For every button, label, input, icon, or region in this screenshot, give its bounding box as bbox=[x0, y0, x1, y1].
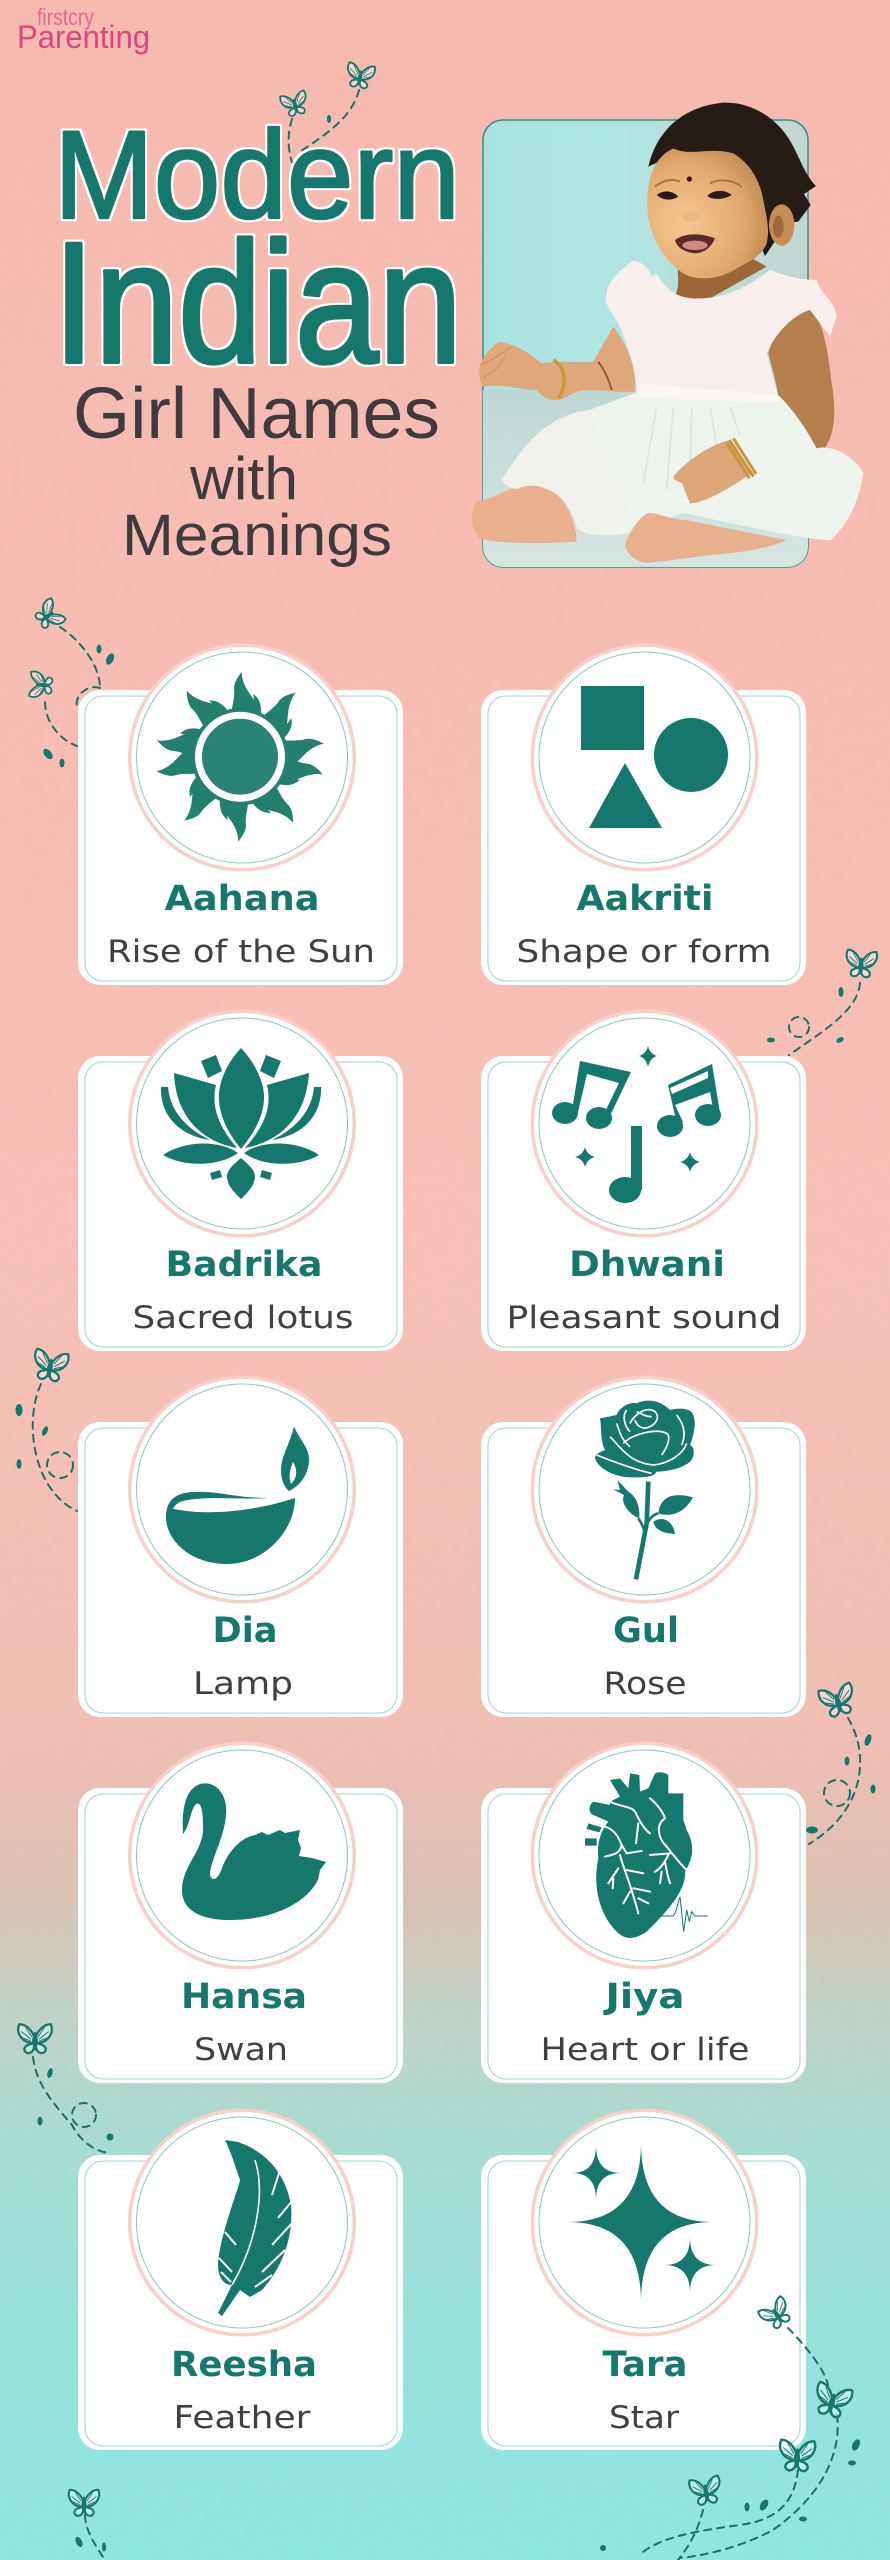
decoration: butterfly bottom left bbox=[69, 2490, 106, 2560]
icon: sun bbox=[153, 672, 327, 842]
card: Dhwani bbox=[481, 1010, 806, 1351]
meaning: Rise of the Sun: Rise of the Sun bbox=[107, 934, 375, 970]
subtitle: Girl Names with Meanings: Meanings bbox=[122, 503, 392, 568]
baby skirt bbox=[589, 392, 863, 541]
name: Tara: Tara bbox=[602, 2345, 688, 2385]
decoration: butterflies top left bbox=[29, 598, 116, 768]
name: Gul: Gul bbox=[613, 1611, 679, 1651]
meaning: Star: Star bbox=[609, 2400, 679, 2436]
baby face features bbox=[657, 191, 732, 200]
name: Aahana: Aahana bbox=[164, 879, 320, 919]
meaning: Shape or form: Shape or form bbox=[516, 934, 772, 970]
name: Dia: Dia bbox=[212, 1611, 278, 1651]
name: Aakriti: Aakriti bbox=[576, 879, 714, 919]
name: Hansa: Hansa bbox=[181, 1977, 307, 2017]
decoration: title butterflies bbox=[280, 62, 376, 162]
logo: FirstCry Parenting: Parenting bbox=[17, 19, 150, 55]
logo: FirstCry Parenting: firstcry bbox=[37, 4, 94, 30]
icon: shapes bbox=[581, 686, 728, 828]
subtitle: Girl Names with Meanings: Girl Names bbox=[73, 374, 440, 454]
name: Dhwani: Dhwani bbox=[569, 1245, 725, 1285]
baby hair bbox=[648, 103, 816, 256]
card: Gul bbox=[481, 1376, 806, 1717]
icon: anatomical heart bbox=[585, 1772, 708, 1938]
title: Modern Indian: Indian bbox=[53, 207, 462, 399]
card: Aahana bbox=[78, 644, 403, 985]
title: Modern Indian bbox=[53, 106, 462, 399]
card: Reesha bbox=[78, 2108, 403, 2450]
meaning: Heart or life: Heart or life bbox=[540, 2032, 750, 2068]
card: Dia bbox=[78, 1376, 403, 1717]
baby right hand bbox=[673, 440, 753, 503]
icon: feather bbox=[218, 2140, 293, 2316]
icon: swan bbox=[182, 1783, 326, 1920]
icon: music notes bbox=[552, 1046, 721, 1203]
decoration: butterflies bottom right bbox=[600, 2296, 862, 2560]
baby right arm bbox=[747, 307, 834, 477]
name: Badrika: Badrika bbox=[166, 1245, 322, 1285]
name: Reesha: Reesha bbox=[171, 2345, 317, 2385]
baby trouser leg bbox=[502, 410, 657, 535]
card: Badrika bbox=[78, 1010, 403, 1351]
card: Tara bbox=[481, 2108, 806, 2450]
card: Hansa bbox=[78, 1742, 403, 2083]
decoration: butterfly right of row two bbox=[767, 949, 877, 1055]
baby right foot bbox=[625, 513, 787, 563]
name: Jiya: Jiya bbox=[603, 1977, 684, 2017]
photo: smiling baby girl in white dress bbox=[472, 103, 863, 567]
meaning: Feather: Feather bbox=[174, 2400, 311, 2436]
meaning: Sacred lotus: Sacred lotus bbox=[132, 1300, 354, 1336]
subtitle: Girl Names with Meanings: with bbox=[189, 445, 298, 512]
meaning: Lamp: Lamp bbox=[193, 1666, 293, 1702]
baby left foot bbox=[472, 486, 577, 543]
icon: sparkling stars bbox=[569, 2145, 716, 2300]
card: Aakriti bbox=[481, 644, 806, 985]
baby head bbox=[769, 204, 794, 246]
decoration: butterfly left of row three bbox=[16, 1349, 77, 1511]
meaning: Swan: Swan bbox=[194, 2032, 288, 2068]
logo: FirstCry Parenting bbox=[17, 4, 150, 55]
card: Jiya bbox=[481, 1742, 806, 2083]
baby neck bbox=[673, 250, 767, 298]
baby left arm and hand bbox=[479, 327, 635, 400]
icon: rose bbox=[595, 1401, 695, 1579]
icon: lotus bbox=[161, 1048, 321, 1199]
meaning: Pleasant sound: Pleasant sound bbox=[506, 1300, 782, 1336]
title: Modern Indian: Modern bbox=[54, 106, 460, 245]
icon: diya lamp bbox=[166, 1426, 309, 1564]
subtitle: Girl Names with Meanings bbox=[73, 374, 440, 568]
meaning: Rose: Rose bbox=[604, 1666, 686, 1702]
decoration: butterfly right of row four bbox=[806, 1682, 876, 1844]
decoration: butterfly left of row five bbox=[18, 2024, 113, 2153]
baby bodice bbox=[606, 261, 837, 397]
